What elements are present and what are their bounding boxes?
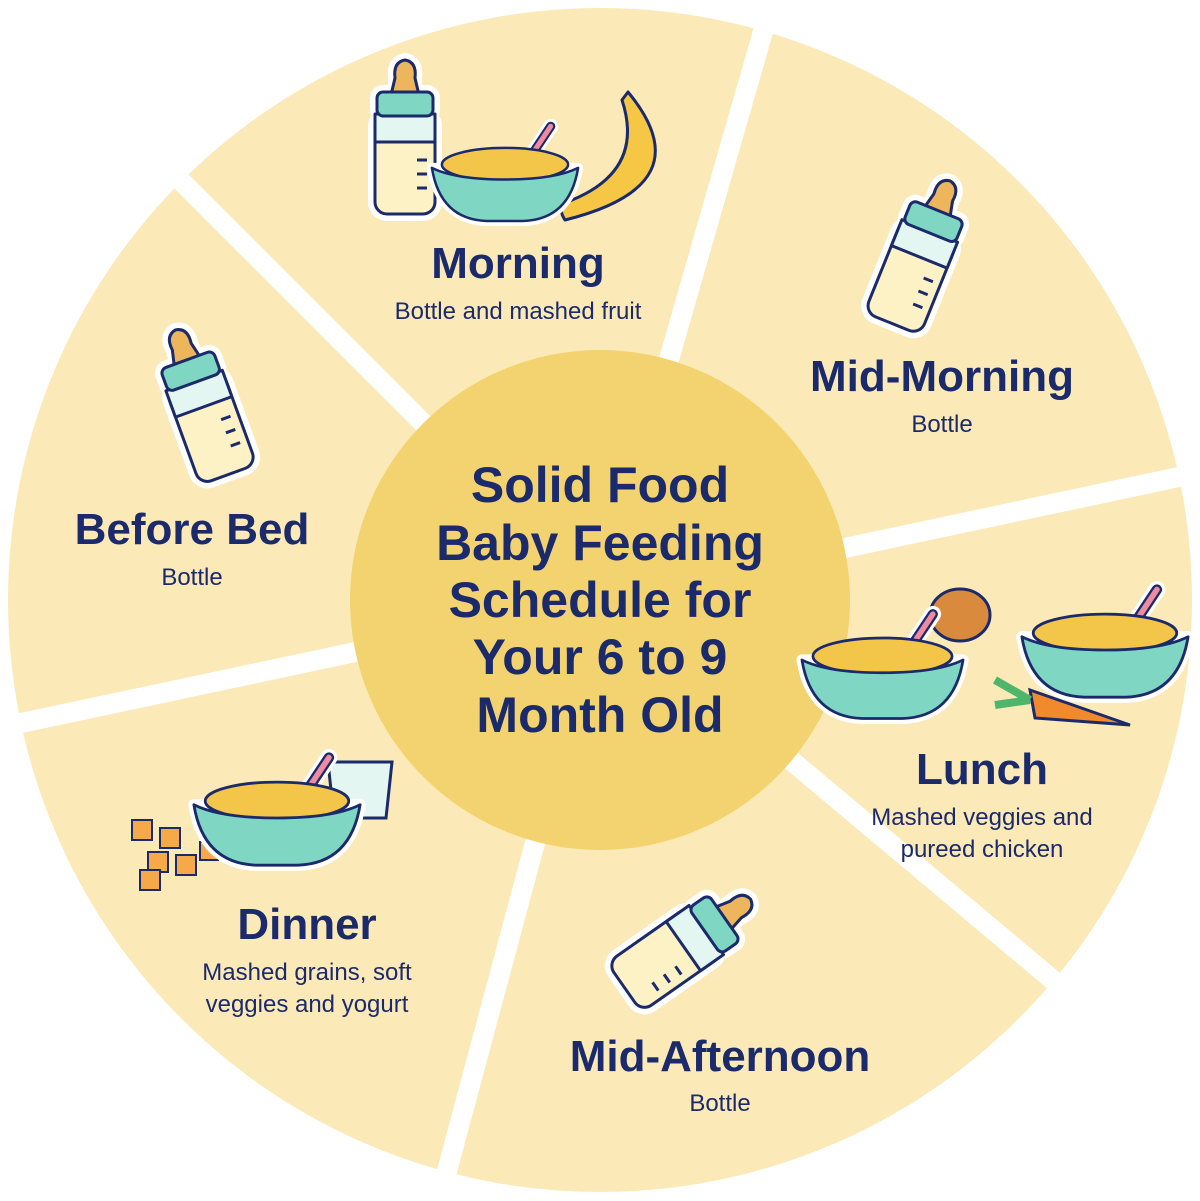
icon: morning bowl bbox=[432, 126, 578, 221]
icon: carrot bbox=[1030, 690, 1130, 725]
panel: dinner: Dinner bbox=[237, 900, 377, 949]
panel: lunch: pureed chicken bbox=[901, 836, 1063, 863]
icon: lunch bowls bbox=[802, 614, 963, 719]
panel: before bed: Before Bed bbox=[75, 505, 309, 554]
center circle title: Schedule for bbox=[449, 572, 751, 628]
icon: banana bbox=[561, 92, 655, 220]
panel: lunch: Lunch bbox=[916, 745, 1048, 794]
panel: mid-afternoon: Mid-Afternoon bbox=[570, 1032, 870, 1081]
panel: morning: Bottle and mashed fruit bbox=[395, 298, 642, 325]
icon: bottle bbox=[607, 875, 768, 1012]
center circle title: Your 6 to 9 bbox=[473, 629, 727, 685]
panel: before bed bbox=[75, 320, 309, 591]
panel: lunch bbox=[802, 589, 1188, 863]
icon: morning bottle bbox=[375, 60, 435, 214]
panel: dinner bbox=[132, 758, 412, 1018]
panel: mid-afternoon bbox=[570, 875, 870, 1117]
icon: yogurt cup bbox=[328, 762, 392, 818]
panel: before bed: Bottle bbox=[161, 564, 223, 591]
panel: mid-morning: Mid-Morning bbox=[810, 352, 1074, 401]
panel: dinner: Mashed grains, soft bbox=[202, 959, 412, 986]
icon: bottle bbox=[147, 320, 257, 485]
panel: dinner: veggies and yogurt bbox=[206, 991, 409, 1018]
panel: mid-morning bbox=[810, 170, 1074, 438]
center circle title: Solid Food bbox=[471, 457, 729, 513]
panel: morning: Morning bbox=[431, 239, 605, 288]
panel: mid-afternoon: Bottle bbox=[689, 1090, 751, 1117]
panel: lunch: Mashed veggies and bbox=[871, 804, 1093, 831]
icon: veggie cubes bbox=[132, 820, 218, 890]
center circle title: Baby Feeding bbox=[436, 515, 764, 571]
panel: mid-morning: Bottle bbox=[911, 411, 973, 438]
center circle title: Month Old bbox=[476, 687, 724, 743]
center circle title bbox=[350, 350, 850, 850]
icon: bottle bbox=[864, 170, 978, 335]
icon: chicken bbox=[930, 589, 990, 641]
panel: morning bbox=[375, 60, 655, 325]
icon: dinner bowl bbox=[194, 758, 360, 865]
